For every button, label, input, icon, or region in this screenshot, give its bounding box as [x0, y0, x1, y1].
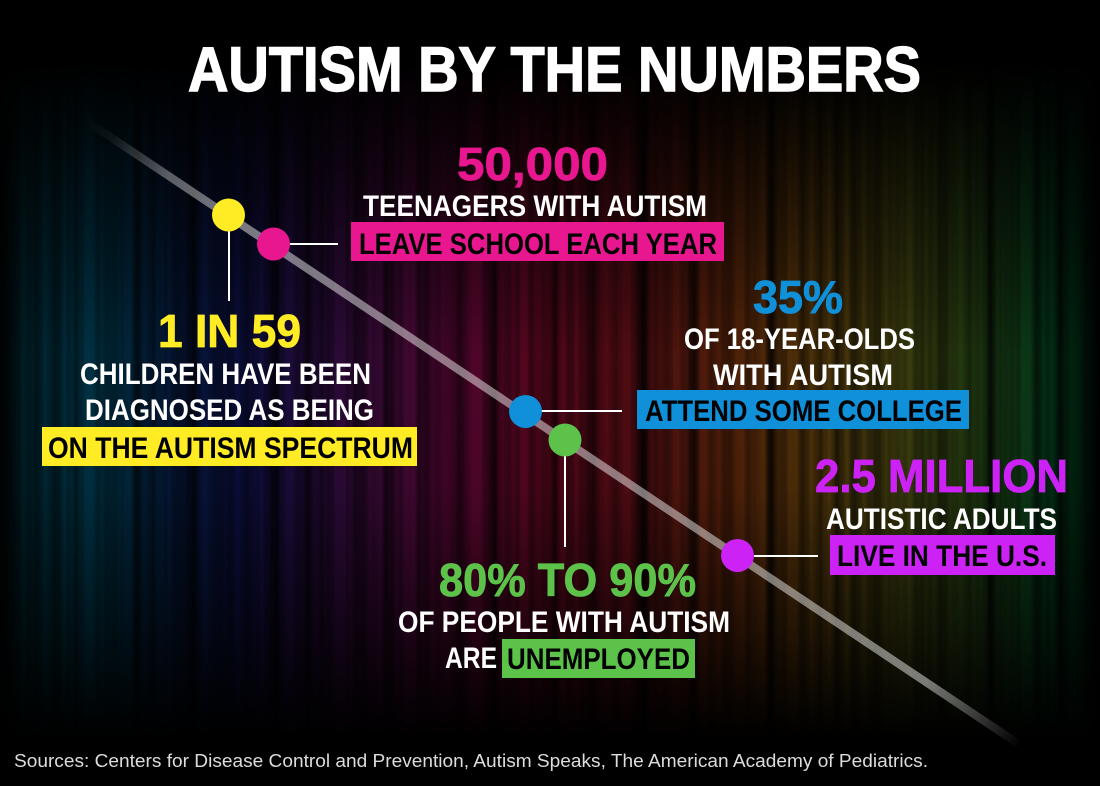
text: teenagers with autism: TEENAGERS WITH AUTISM	[363, 190, 707, 223]
text: diagnosed as being: DIAGNOSED AS BEING	[85, 394, 374, 427]
text: of 18-year-olds: OF 18-YEAR-OLDS	[684, 323, 915, 356]
stat: 80% to 90%: 80% TO 90%	[439, 554, 696, 606]
title: AUTISM BY THE NUMBERS	[188, 35, 921, 105]
highlight: yellow box	[42, 427, 417, 466]
stat: 1 in 59: 1 IN 59	[158, 305, 301, 357]
leader line: pink	[290, 243, 338, 245]
dot: yellow	[212, 198, 245, 232]
highlight text: live in the u.s.: LIVE IN THE U.S.	[837, 540, 1047, 573]
leader line: purple	[754, 555, 818, 557]
dot: blue	[509, 395, 542, 428]
leader line: yellow	[228, 231, 230, 301]
dot: green	[548, 424, 582, 456]
callout: 2.5 million	[721, 450, 1068, 575]
stat: 50,000: 50,000	[457, 138, 608, 190]
callout: 1 in 59	[42, 198, 417, 466]
highlight text: on the autism spectrum: ON THE AUTISM SPECTRUM	[48, 432, 413, 465]
highlight text: leave school each year: LEAVE SCHOOL EACH YEAR	[359, 228, 717, 261]
text: are: ARE	[445, 642, 497, 675]
text: of people with autism: OF PEOPLE WITH AUTISM	[398, 606, 730, 639]
leader line: blue	[541, 410, 622, 412]
highlight: purple box	[830, 535, 1055, 575]
highlight text: unemployed: UNEMPLOYED	[507, 643, 690, 676]
dot: purple	[721, 539, 754, 572]
highlight: blue box	[637, 390, 969, 429]
highlight text: attend some college: ATTEND SOME COLLEGE	[645, 395, 962, 428]
sources: Sources: Centers for Disease Control and Prevention, Autism Speaks, The American Academy of Pediatrics.	[14, 750, 928, 771]
text: children have been: CHILDREN HAVE BEEN	[80, 358, 371, 391]
highlight: green box	[502, 639, 695, 678]
leader line: green	[564, 456, 566, 547]
callout: 80% to 90%	[398, 424, 730, 678]
text: with autism: WITH AUTISM	[713, 359, 893, 392]
stat: 35%: 35%	[753, 271, 843, 323]
stat: 2.5 million: 2.5 MILLION	[815, 450, 1068, 502]
callout: 50,000	[257, 138, 724, 261]
dot: pink	[257, 228, 290, 260]
callout: 35%	[509, 271, 969, 429]
highlight: pink box	[351, 222, 724, 261]
text: autistic adults: AUTISTIC ADULTS	[826, 503, 1057, 536]
diagonal timeline line	[85, 120, 1020, 745]
